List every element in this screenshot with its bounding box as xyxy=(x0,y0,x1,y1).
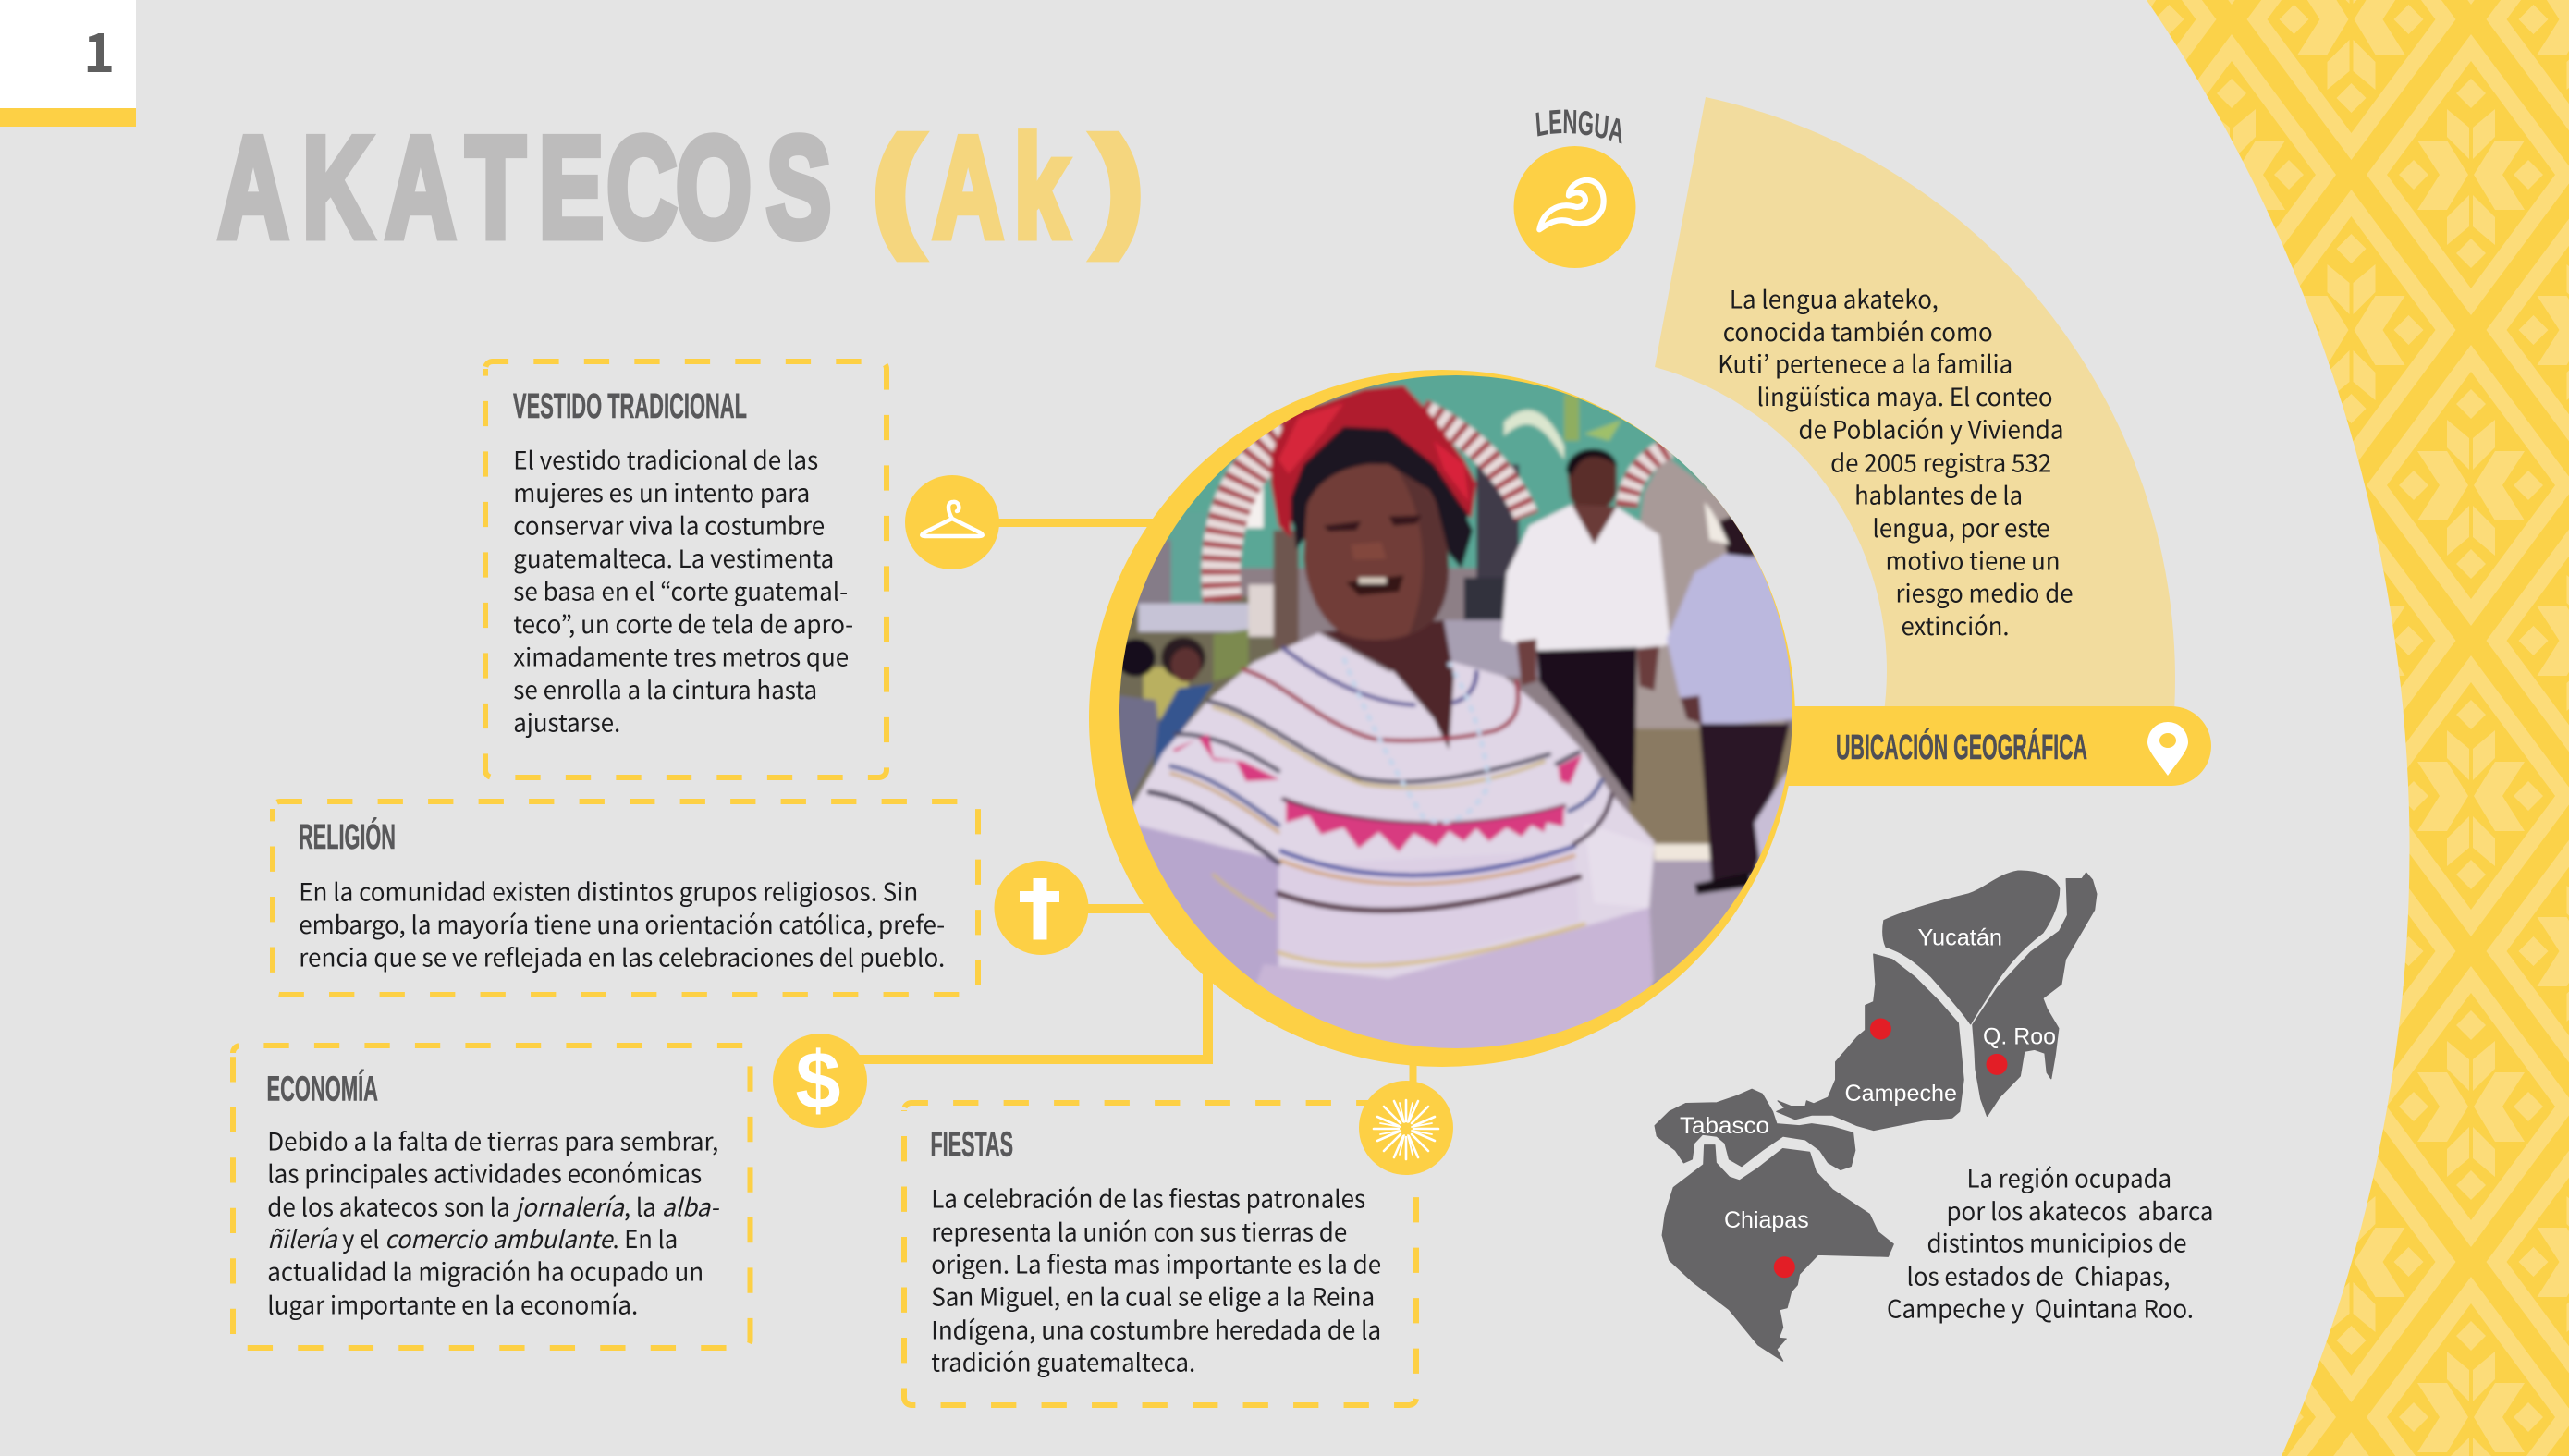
photo ring xyxy=(1089,370,1795,1067)
body text: conservar viva la costumbre xyxy=(513,507,825,543)
geographic location pill xyxy=(1756,706,2211,786)
lengua text block: lengua, por este xyxy=(1873,508,2050,544)
title: Ak xyxy=(933,108,1069,268)
panel: vestido tradicional xyxy=(485,361,887,777)
map: state names xyxy=(1680,924,2056,1233)
body text: ñilería y el comercio ambulante. En la xyxy=(267,1219,678,1255)
body text: se enrolla a la cintura hasta xyxy=(513,670,817,706)
map: Tabasco xyxy=(1655,1089,1855,1169)
lengua text block: motivo tiene un xyxy=(1886,542,2060,578)
textile pattern band xyxy=(2034,0,2569,1456)
body text: guatemalteca. La vestimenta xyxy=(513,539,834,575)
body text xyxy=(267,1121,720,1321)
lengua text block: de 2005 registra 532 xyxy=(1830,444,2051,480)
map: state names: Chiapas xyxy=(1724,1207,1809,1233)
arches xyxy=(1221,432,1299,601)
page number tab: 1 xyxy=(83,10,115,88)
title: AKATECOS xyxy=(218,108,831,268)
map: state names: Tabasco xyxy=(1680,1113,1769,1139)
lengua text block: lingüística maya. El conteo xyxy=(1756,377,2052,413)
title xyxy=(218,108,1141,268)
body text: La celebración de las fiestas patronales xyxy=(931,1180,1365,1216)
body text: embargo, la mayoría tiene una orientación católica, prefe- xyxy=(299,905,945,941)
body text: actualidad la migración ha ocupado un xyxy=(267,1253,703,1289)
body text: El vestido tradicional de las xyxy=(513,441,818,477)
language fan panel xyxy=(1655,97,2175,712)
lengua text block xyxy=(1718,280,2073,642)
title: ( xyxy=(875,116,918,257)
icon: cross xyxy=(995,861,1089,955)
map: state names: Q. Roo xyxy=(1983,1024,2056,1050)
panel: fiestas xyxy=(904,1103,1416,1405)
title: ) xyxy=(1098,116,1141,257)
body text: se basa en el “corte guatemal- xyxy=(513,572,848,608)
left background xyxy=(1120,595,1281,806)
region text block: por los akatecos abarca xyxy=(1947,1192,2213,1228)
body text: Indígena, una costumbre heredada de la xyxy=(931,1310,1381,1346)
lengua text block: conocida también como xyxy=(1723,312,1993,349)
map: Campeche xyxy=(1777,954,1963,1131)
region text block: La región ocupada xyxy=(1967,1159,2171,1195)
body text: mujeres es un intento para xyxy=(513,473,810,509)
geographic location pill: UBICACIÓN GEOGRÁFICA xyxy=(1836,727,2087,767)
headband xyxy=(1271,385,1476,537)
map of states xyxy=(1655,871,2097,1361)
icon: dollar xyxy=(773,1034,867,1128)
page number tab xyxy=(0,0,136,127)
hair xyxy=(1291,427,1473,569)
connectors xyxy=(820,519,1416,1095)
neck xyxy=(1321,620,1454,750)
lengua text block: de Población y Vivienda xyxy=(1799,410,2063,446)
body text: las principales actividades económicas xyxy=(267,1155,702,1191)
man two xyxy=(1718,515,1755,559)
heading: FIESTAS xyxy=(930,1126,1013,1165)
body text: ajustarse. xyxy=(513,704,620,740)
body text xyxy=(931,1180,1381,1378)
region text block: los estados de Chiapas, xyxy=(1906,1257,2171,1293)
map: Chiapas xyxy=(1662,1145,1893,1361)
map: Quintana Roo xyxy=(1973,873,2097,1116)
lengua text block: La lengua akateko, xyxy=(1730,280,1939,316)
body text: rencia que se ve reflejada en las celebraciones del pueblo. xyxy=(299,938,945,974)
body text: San Miguel, en la cual se elige a la Reina xyxy=(931,1278,1375,1314)
body text: de los akatecos son la jornalería, la alba- xyxy=(267,1187,720,1223)
heading: VESTIDO TRADICIONAL xyxy=(513,387,747,426)
body text xyxy=(513,441,853,740)
lengua text block: riesgo medio de xyxy=(1895,573,2073,609)
lengua text block: hablantes de la xyxy=(1854,475,2023,511)
heading: lengua: LENGUA xyxy=(1536,109,1621,144)
body text: ximadamente tres metros que xyxy=(513,638,849,674)
body text: lugar importante en la economía. xyxy=(267,1285,638,1321)
body text: En la comunidad existen distintos grupos religiosos. Sin xyxy=(299,872,918,908)
heading: ECONOMÍA xyxy=(266,1069,378,1109)
icon: language swirl xyxy=(1514,146,1636,268)
pink embroidery xyxy=(1286,801,1564,852)
lengua text block: Kuti’ pertenece a la familia xyxy=(1718,344,2012,381)
map: Yucatan xyxy=(1883,871,2060,1024)
leaves xyxy=(1504,410,1564,459)
map: state names: Yucatán xyxy=(1917,924,2002,950)
body text: tradición guatemalteca. xyxy=(931,1342,1195,1378)
body text xyxy=(299,872,945,974)
icon: dollar: $ xyxy=(796,1034,840,1126)
body text: representa la unión con sus tierras de xyxy=(931,1212,1347,1248)
icon: hanger xyxy=(905,475,999,569)
heading: RELIGIÓN xyxy=(299,816,396,857)
map: state names: Campeche xyxy=(1845,1081,1957,1107)
body text: Debido a la falta de tierras para sembrar, xyxy=(267,1121,718,1157)
region text block: distintos municipios de xyxy=(1927,1224,2187,1260)
photo: woman in traditional blouse xyxy=(1119,375,1792,1048)
kids xyxy=(1116,639,1156,677)
hair underlay xyxy=(1287,459,1471,540)
body text: origen. La fiesta mas importante es la de xyxy=(931,1245,1381,1281)
map: location dots xyxy=(1774,1019,2008,1278)
man one xyxy=(1567,450,1617,512)
panel: religion xyxy=(273,801,978,995)
region text block xyxy=(1887,1159,2213,1325)
lengua text block: extinción. xyxy=(1901,606,2010,642)
region text block: Campeche y Quintana Roo. xyxy=(1887,1289,2194,1325)
icon: fireworks xyxy=(1359,1081,1453,1175)
necklace xyxy=(1344,658,1489,822)
body text: teco”, un corte de tela de apro- xyxy=(513,605,853,641)
blouse stripes xyxy=(1149,648,1611,965)
panel: economia xyxy=(233,1046,751,1348)
face xyxy=(1303,463,1449,640)
blouse xyxy=(1132,630,1657,980)
